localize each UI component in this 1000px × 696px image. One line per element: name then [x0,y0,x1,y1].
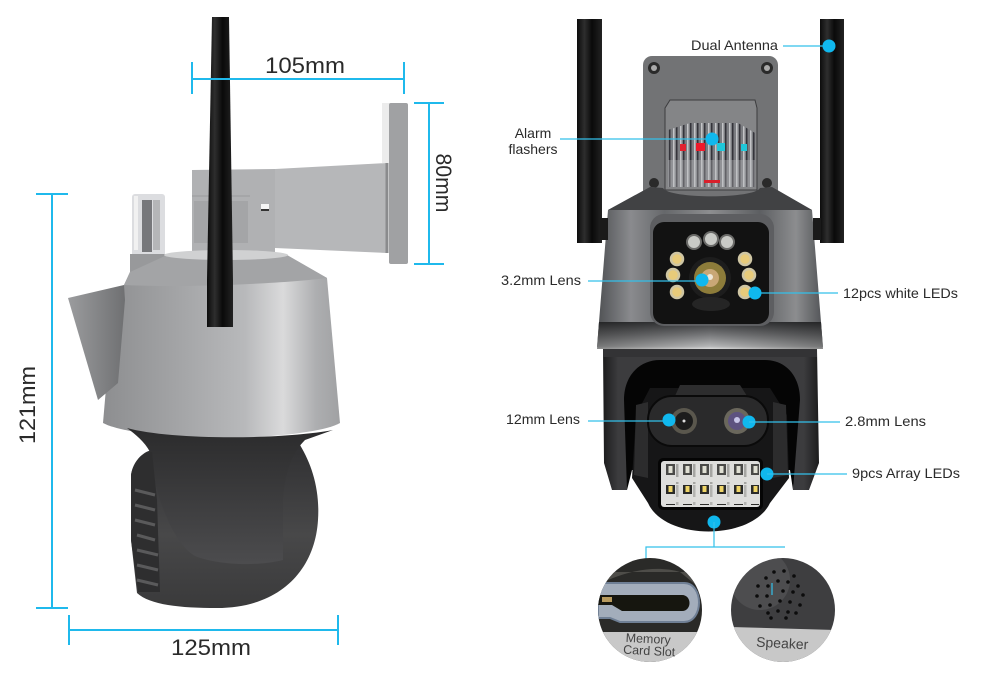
callout: 12pcs white LEDs: 12pcs white LEDs [843,285,958,301]
camera side hood [68,285,125,400]
callout: bottom connector [646,516,785,560]
callout: dual antenna: Dual Antenna [691,37,778,53]
dimension: 80mm [414,103,456,264]
speaker label: Speaker [756,634,809,652]
camera upper housing [103,250,340,438]
panel: front view camera [501,19,960,560]
lower housing [603,349,819,532]
camera face panel [650,214,774,326]
array LEDs panel [658,458,763,510]
callout: 12mm lens [506,411,676,427]
callout: 9pcs array LEDs: 9pcs Array LEDs [852,465,960,481]
alarm flasher cylinder [130,194,166,274]
left 12mm lens [671,408,697,434]
callout: 3.2mm lens [501,272,708,288]
dimension: 125mm [69,615,338,660]
antenna [207,17,233,327]
wall bracket [192,103,408,264]
callout: 2.8mm lens [742,413,926,429]
dimension: 121mm [15,194,68,608]
label 80mm: 80mm [431,154,456,212]
callout: alarm flashers: flashers [508,141,558,157]
memory card label: Card Slot [623,643,676,659]
detail: speaker [730,550,835,662]
mounting plate [643,56,778,206]
alarm light [668,123,755,187]
callout: dual antenna [691,37,836,53]
right antenna [820,19,844,243]
right 2.8mm lens [724,408,750,434]
dimension: 105mm [192,53,404,94]
lens bar [648,396,768,446]
label 125mm: 125mm [171,635,251,660]
label 105mm: 105mm [265,53,345,78]
top white LEDs [687,232,734,249]
callout: 12pcs white LEDs [748,285,958,301]
callout: 12mm lens: 12mm Lens [506,411,580,427]
camera lower ball [127,428,333,608]
panel: side view camera [68,17,408,608]
main lens [689,257,731,299]
label 121mm: 121mm [15,366,40,444]
yellow LEDs [667,253,755,298]
callout: alarm flashers [508,125,718,157]
left antenna [577,19,602,243]
memory card label: Memory [625,631,672,647]
callout: 2.8mm lens: 2.8mm Lens [845,413,926,429]
callout: 9pcs array LEDs [760,465,960,481]
detail: memory card slot [598,558,702,662]
callout: alarm flashers: Alarm [515,125,551,141]
callout: 3.2mm lens: 3.2mm Lens [501,272,581,288]
memory card label [623,631,676,659]
upper housing [597,187,823,349]
